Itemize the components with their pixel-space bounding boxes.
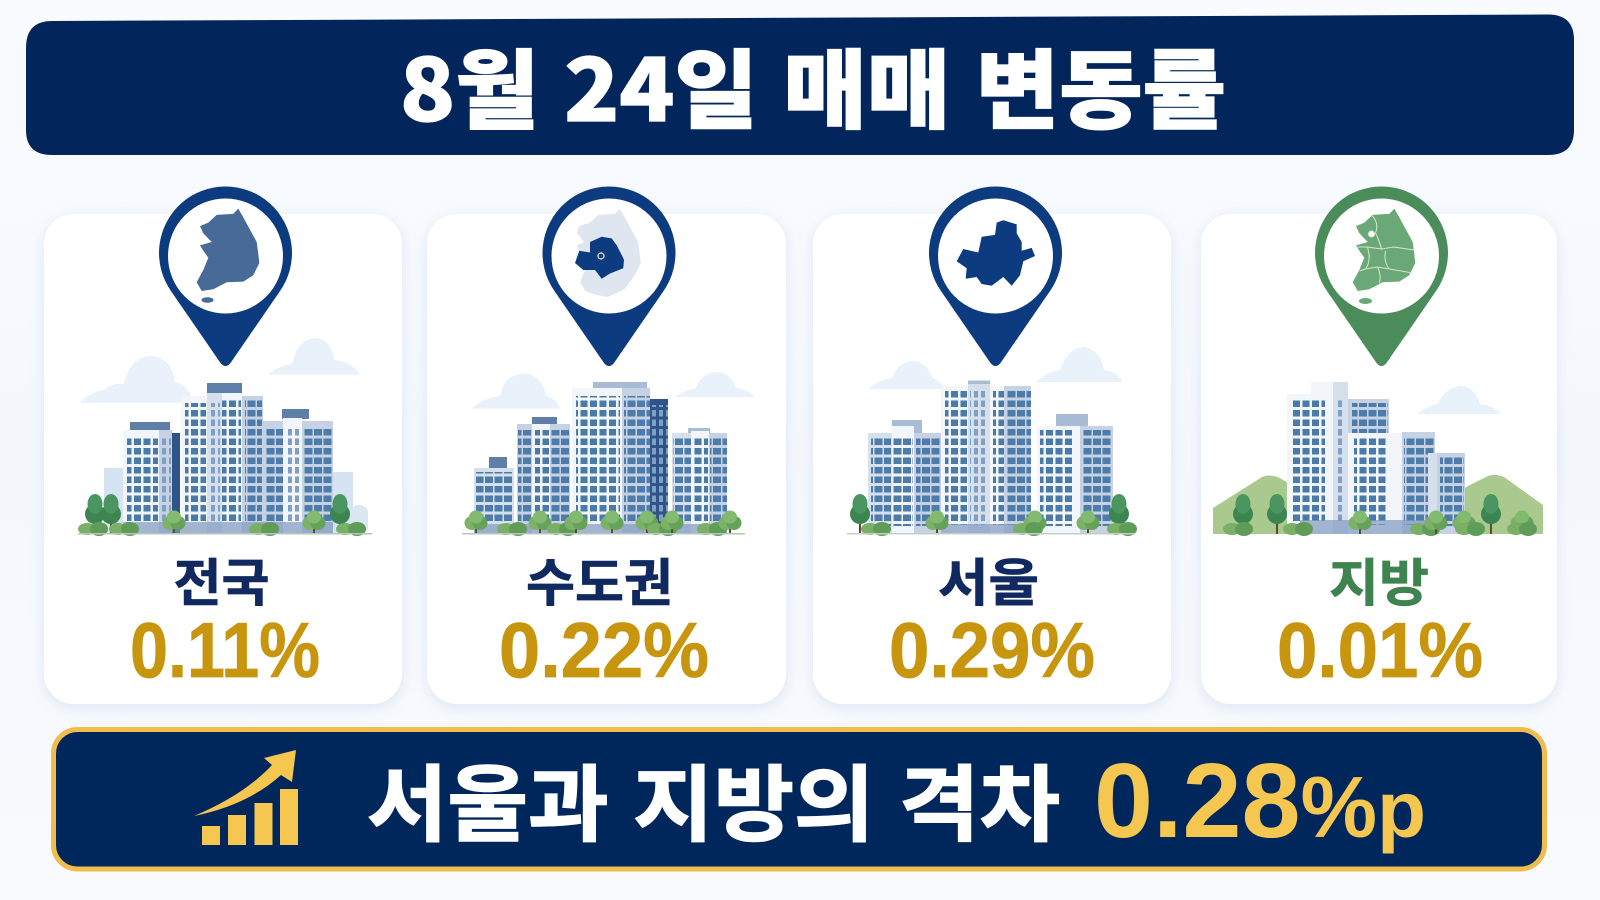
- icon: pin with Korea map: [159, 186, 292, 366]
- panel: 수도권: [427, 186, 786, 704]
- label: 수도권: 수도권: [526, 542, 673, 616]
- panel: 지방: [1201, 186, 1557, 704]
- label: 서울: 서울: [938, 542, 1039, 616]
- apartment buildings: [462, 382, 745, 536]
- value: 0.01%: 0.01%: [1277, 606, 1483, 694]
- cloud: [1417, 386, 1502, 414]
- value: 0.11%: 0.11%: [130, 606, 320, 694]
- apartment buildings with hills: [1213, 382, 1543, 536]
- clouds: [868, 347, 1123, 389]
- label: 전국: 전국: [174, 542, 270, 616]
- icon: pin with capital area map: [542, 186, 676, 366]
- icon: rising bar chart with arrow: [194, 750, 298, 845]
- clouds: [79, 338, 360, 403]
- apartment buildings: [78, 383, 372, 536]
- title banner: [26, 14, 1574, 155]
- value: 0.22%: 0.22%: [499, 606, 709, 694]
- icon: pin with Seoul map: [929, 186, 1062, 366]
- callout bar: [54, 730, 1544, 869]
- callout text: 서울과 지방의 격차: [367, 738, 1060, 858]
- apartment buildings: [847, 380, 1137, 536]
- title text: 8월 24일 매매 변동률: [400, 21, 1226, 146]
- label: 지방: 지방: [1329, 542, 1429, 616]
- callout value: 0.28%p: [1094, 742, 1426, 860]
- icon: pin with provinces map: [1315, 186, 1448, 366]
- value: 0.29%: 0.29%: [889, 606, 1095, 694]
- panel: 서울: [813, 186, 1171, 704]
- panel: 전국: [44, 186, 402, 704]
- clouds: [472, 372, 755, 409]
